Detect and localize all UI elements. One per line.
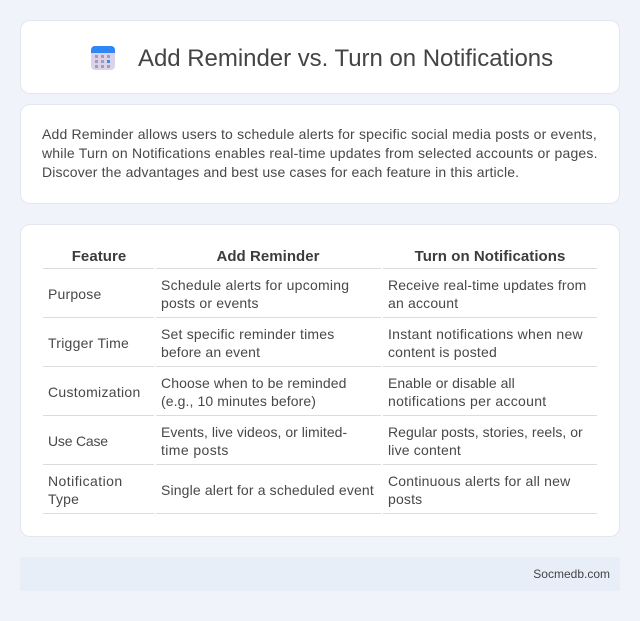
intro text — [42, 126, 598, 180]
row: purpose: Receive real-time updates from — [388, 277, 586, 293]
row: notification type: Single alert for a scheduled event — [161, 482, 374, 498]
row: customization: Enable or disable all — [388, 375, 515, 391]
intro text: while Turn on Notifications enables real-time updates from selected accounts or pages. — [42, 145, 598, 161]
row: trigger time: Trigger Time — [48, 335, 129, 351]
intro text: Discover the advantages and best use cases for each feature in this article. — [42, 164, 519, 180]
row: notification type: Notification — [48, 473, 123, 489]
title panel — [20, 20, 620, 94]
row: customization: (e.g., 10 minutes before) — [161, 393, 316, 409]
footer bar — [20, 557, 620, 591]
row: notification type: Continuous alerts for all new — [388, 473, 570, 489]
header row: Feature — [72, 248, 126, 265]
row: customization: notifications per account — [388, 393, 546, 409]
row: purpose: Schedule alerts for upcoming — [161, 277, 349, 293]
row: notification type: posts — [388, 491, 422, 507]
row: trigger time — [43, 326, 597, 367]
header row — [43, 248, 597, 269]
comparison table panel — [20, 224, 620, 537]
row: purpose — [43, 277, 597, 318]
row: trigger time: Instant notifications when new — [388, 326, 583, 342]
row: purpose: an account — [388, 295, 458, 311]
row: use case — [43, 424, 597, 465]
row: use case: Regular posts, stories, reels, or — [388, 424, 583, 440]
header row: Add Reminder — [216, 248, 320, 265]
row: purpose: posts or events — [161, 295, 259, 311]
row: notification type: Type — [48, 491, 79, 507]
row: use case: live content — [388, 442, 461, 458]
row: trigger time: Set specific reminder times — [161, 326, 334, 342]
table — [43, 248, 597, 514]
header row: Turn on Notifications — [415, 248, 565, 265]
row: customization — [43, 375, 597, 416]
intro panel — [20, 104, 620, 204]
row: purpose: Purpose — [48, 286, 101, 302]
row: customization: Choose when to be reminded — [161, 375, 346, 391]
row: trigger time: before an event — [161, 344, 260, 360]
row: use case: Use Case — [48, 433, 108, 449]
row: use case: time posts — [161, 442, 229, 458]
row: trigger time: content is posted — [388, 344, 497, 360]
title: Add Reminder vs. Turn on Notifications — [138, 45, 553, 72]
row: use case: Events, live videos, or limited- — [161, 424, 347, 440]
row: customization: Customization — [48, 384, 141, 400]
intro text: Add Reminder allows users to schedule alerts for specific social media posts or events, — [42, 126, 597, 142]
icon: calendar — [91, 46, 115, 70]
row: notification type — [43, 473, 597, 514]
footer text: Socmedb.com — [533, 567, 610, 581]
